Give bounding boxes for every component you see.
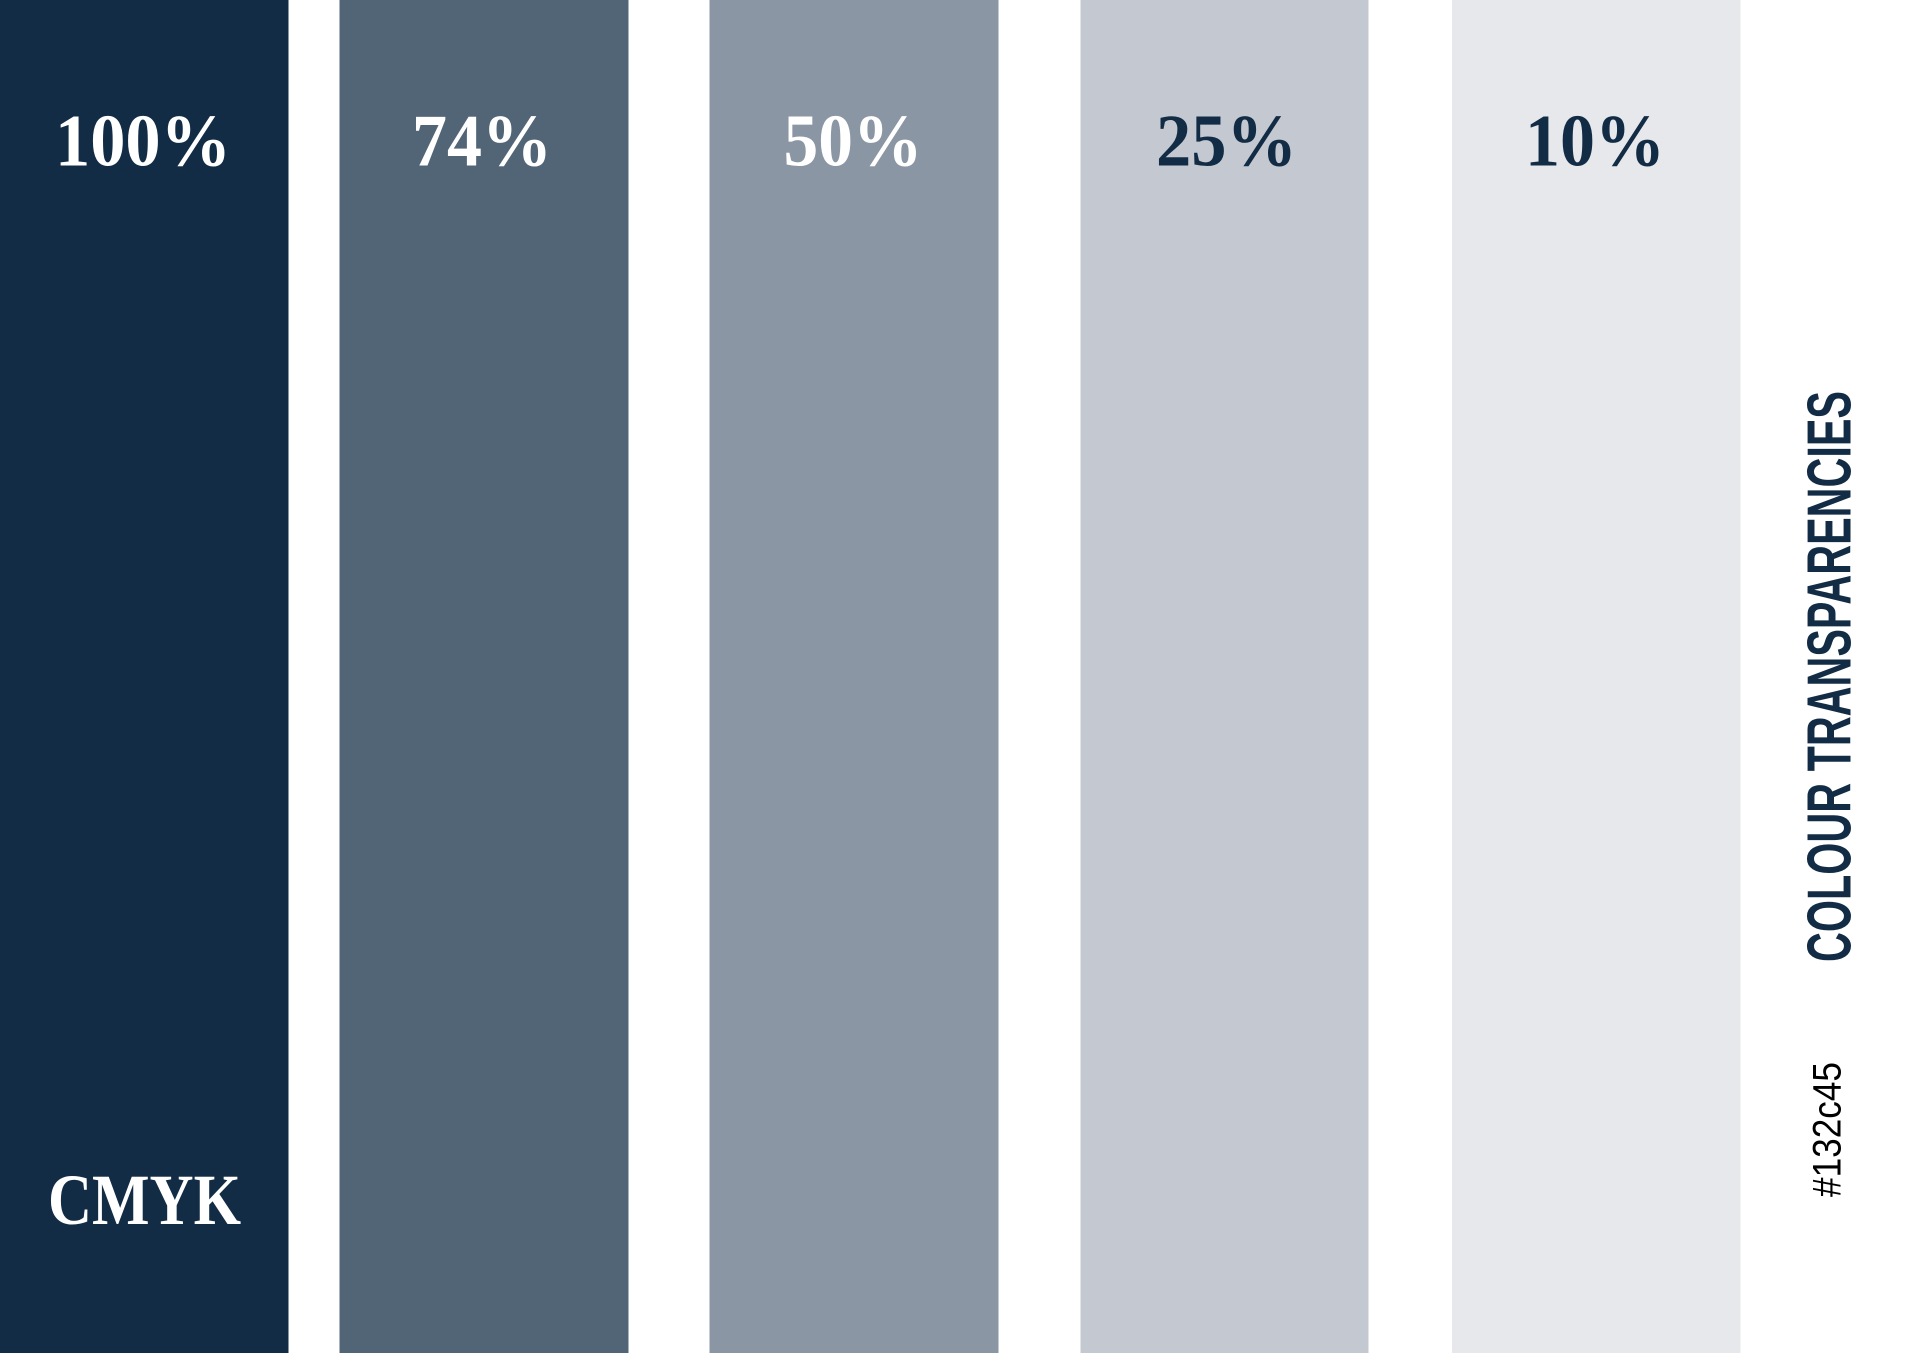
hex code: #132c45 <box>1806 1062 1850 1197</box>
swatch: 25% <box>1080 0 1368 1353</box>
label: 25%: 25% <box>1156 100 1297 182</box>
swatch: 10% <box>1452 0 1740 1353</box>
swatch: 100% <box>0 0 288 1353</box>
heading: colour transparencies: COLOUR TRANSPARENCIES <box>1796 391 1864 962</box>
label: 50%: 50% <box>784 100 922 182</box>
swatch: 50% <box>710 0 998 1353</box>
swatch: 74% <box>340 0 628 1353</box>
label: 10%: 10% <box>1525 100 1665 182</box>
label: 100%: 100% <box>55 100 231 182</box>
label: CMYK: CMYK <box>48 1160 241 1240</box>
label: 74%: 74% <box>412 100 552 182</box>
